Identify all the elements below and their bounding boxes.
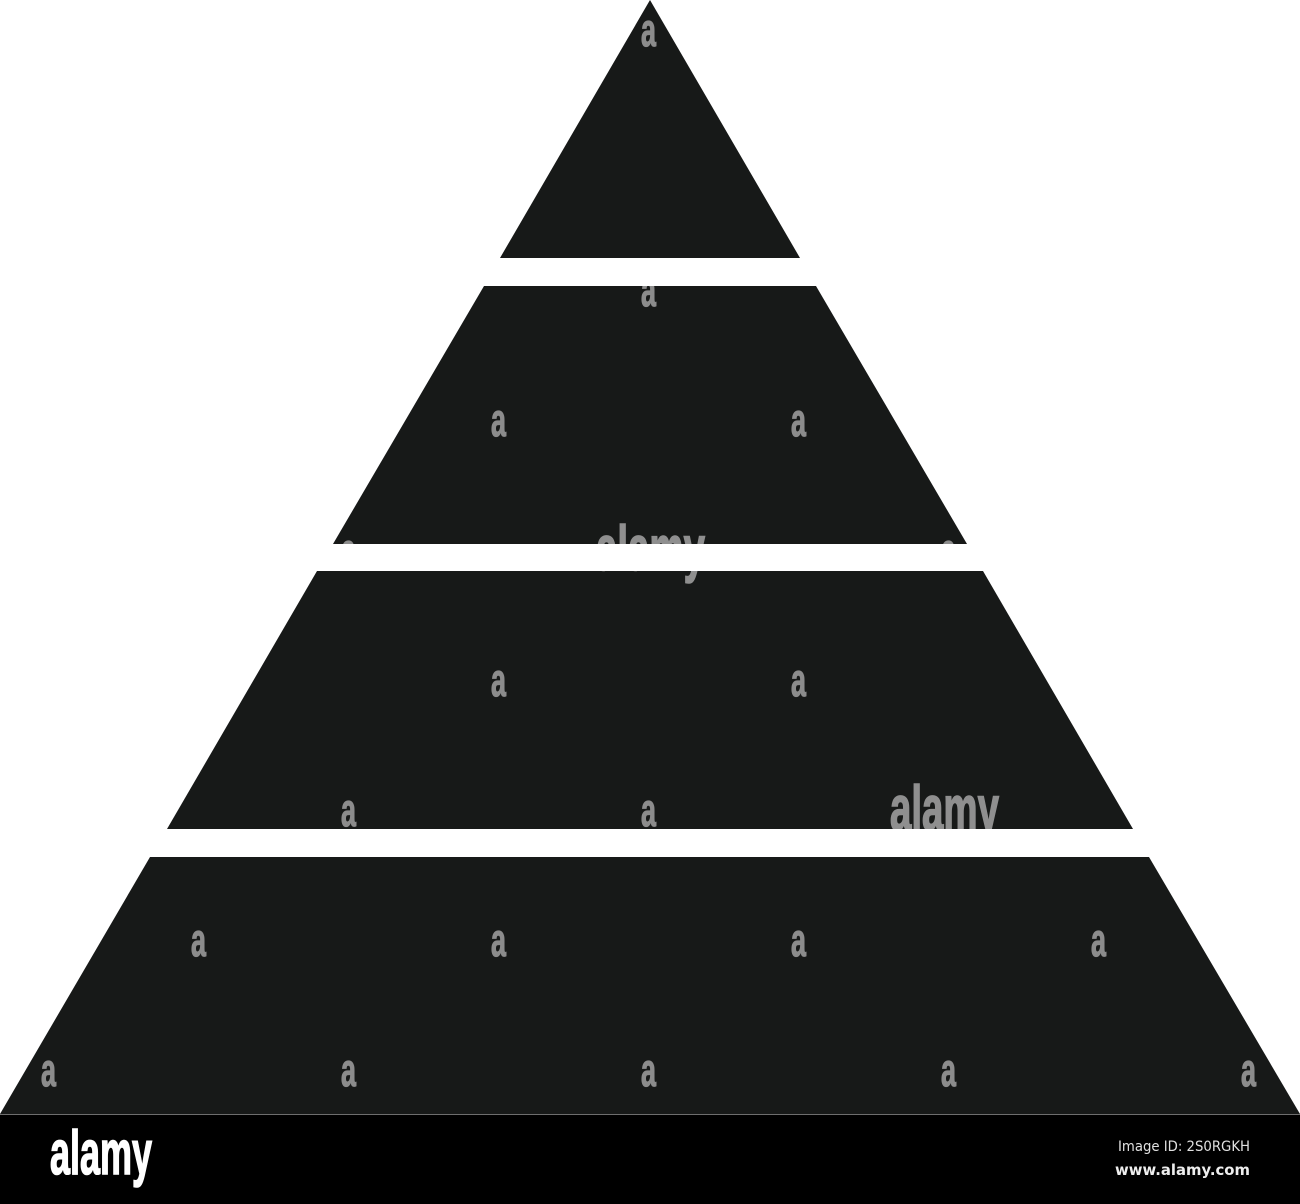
- watermark pattern: a: [641, 784, 656, 836]
- pyramid tier 3: [167, 571, 1133, 829]
- website: www.alamy.com: [1115, 1161, 1250, 1179]
- watermark pattern: alamy: [890, 774, 999, 844]
- watermark pattern: a: [941, 524, 956, 576]
- watermark pattern: a: [491, 654, 506, 706]
- pyramid tier 4: base: [0, 857, 1300, 1114]
- watermark pattern: a: [1241, 1044, 1256, 1096]
- watermark pattern: a: [41, 1044, 56, 1096]
- watermark pattern: a: [941, 1044, 956, 1096]
- pyramid tier 1: top triangle: [500, 0, 800, 258]
- watermark pattern: a: [791, 654, 806, 706]
- image id: Image ID: 2S0RGKH: [1118, 1139, 1250, 1155]
- watermark pattern: a: [641, 1044, 656, 1096]
- watermark pattern: a: [191, 914, 206, 966]
- watermark pattern: a: [341, 1044, 356, 1096]
- watermark pattern: a: [641, 264, 656, 316]
- footer bar: [0, 1114, 1300, 1204]
- watermark pattern: a: [341, 524, 356, 576]
- pyramid tier 2: [333, 286, 967, 544]
- watermark pattern: a: [641, 4, 656, 56]
- watermark pattern: a: [491, 394, 506, 446]
- watermark pattern: a: [1091, 914, 1106, 966]
- watermark pattern: alamy: [596, 514, 705, 584]
- watermark pattern: a: [791, 394, 806, 446]
- watermark pattern: a: [791, 914, 806, 966]
- footer logo: alamy: [50, 1119, 152, 1188]
- watermark pattern: a: [341, 784, 356, 836]
- watermark pattern: a: [491, 914, 506, 966]
